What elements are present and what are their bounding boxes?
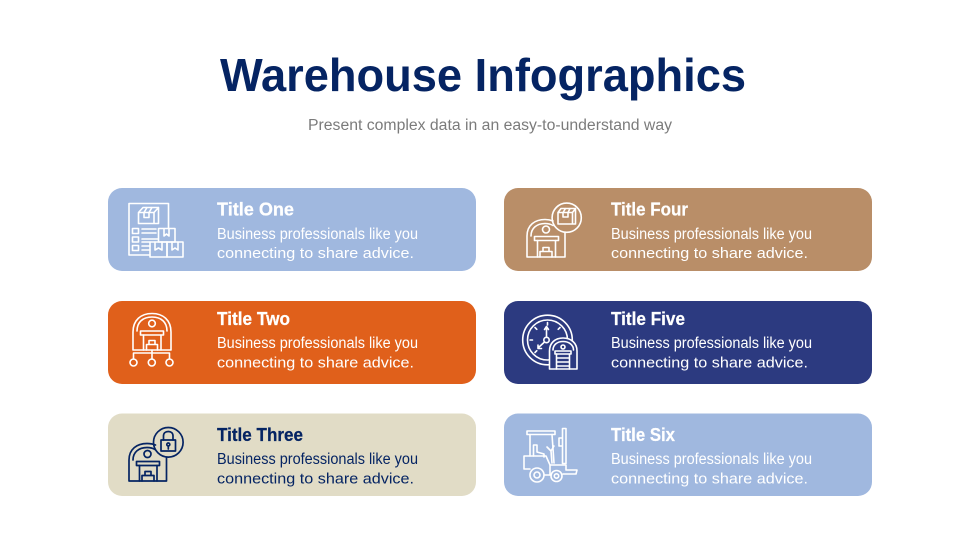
icon: warehouse with lock bbox=[129, 428, 183, 481]
body text: Business professionals like you bbox=[611, 451, 812, 468]
card background bbox=[504, 301, 872, 384]
panel: title three bbox=[108, 414, 476, 496]
panel: title five bbox=[504, 301, 872, 384]
card background bbox=[108, 301, 476, 384]
body text: Business professionals like you bbox=[217, 451, 418, 468]
body text: Business professionals like you bbox=[217, 226, 418, 243]
icon: warehouse network bbox=[130, 314, 173, 366]
title: Warehouse Infographics bbox=[220, 49, 746, 101]
body text: Business professionals like you bbox=[217, 335, 418, 352]
body text: Business professionals like you bbox=[611, 335, 812, 352]
subtitle: Present complex data in an easy-to-understand way bbox=[308, 117, 672, 134]
panel: title two: connecting to share advice. bbox=[217, 356, 414, 372]
heading: Title One bbox=[217, 198, 294, 220]
body text: Business professionals like you bbox=[611, 226, 812, 243]
panel: title six: connecting to share advice. bbox=[611, 472, 808, 488]
heading: Title Five bbox=[611, 308, 685, 329]
panel: title four: connecting to share advice. bbox=[611, 246, 808, 262]
card background bbox=[108, 188, 476, 271]
panel: title six bbox=[504, 414, 872, 496]
panel: title four bbox=[504, 188, 872, 271]
heading: Title Two bbox=[217, 308, 290, 329]
panel: title three: connecting to share advice. bbox=[217, 472, 414, 488]
icon: warehouse with box bbox=[527, 203, 581, 257]
heading: Title Three bbox=[217, 424, 303, 445]
icon: clock with warehouse bbox=[523, 315, 577, 369]
card background bbox=[504, 188, 872, 271]
card background bbox=[504, 414, 872, 496]
panel: title one: connecting to share advice. bbox=[217, 246, 414, 262]
panel: title five: connecting to share advice. bbox=[611, 356, 808, 372]
icon: forklift bbox=[524, 428, 577, 482]
icon: inventory list with boxes bbox=[129, 204, 183, 257]
card background bbox=[108, 414, 476, 496]
heading: Title Six bbox=[611, 424, 676, 445]
panel: title two bbox=[108, 301, 476, 384]
panel: title one bbox=[108, 188, 476, 271]
heading: Title Four bbox=[611, 198, 688, 220]
